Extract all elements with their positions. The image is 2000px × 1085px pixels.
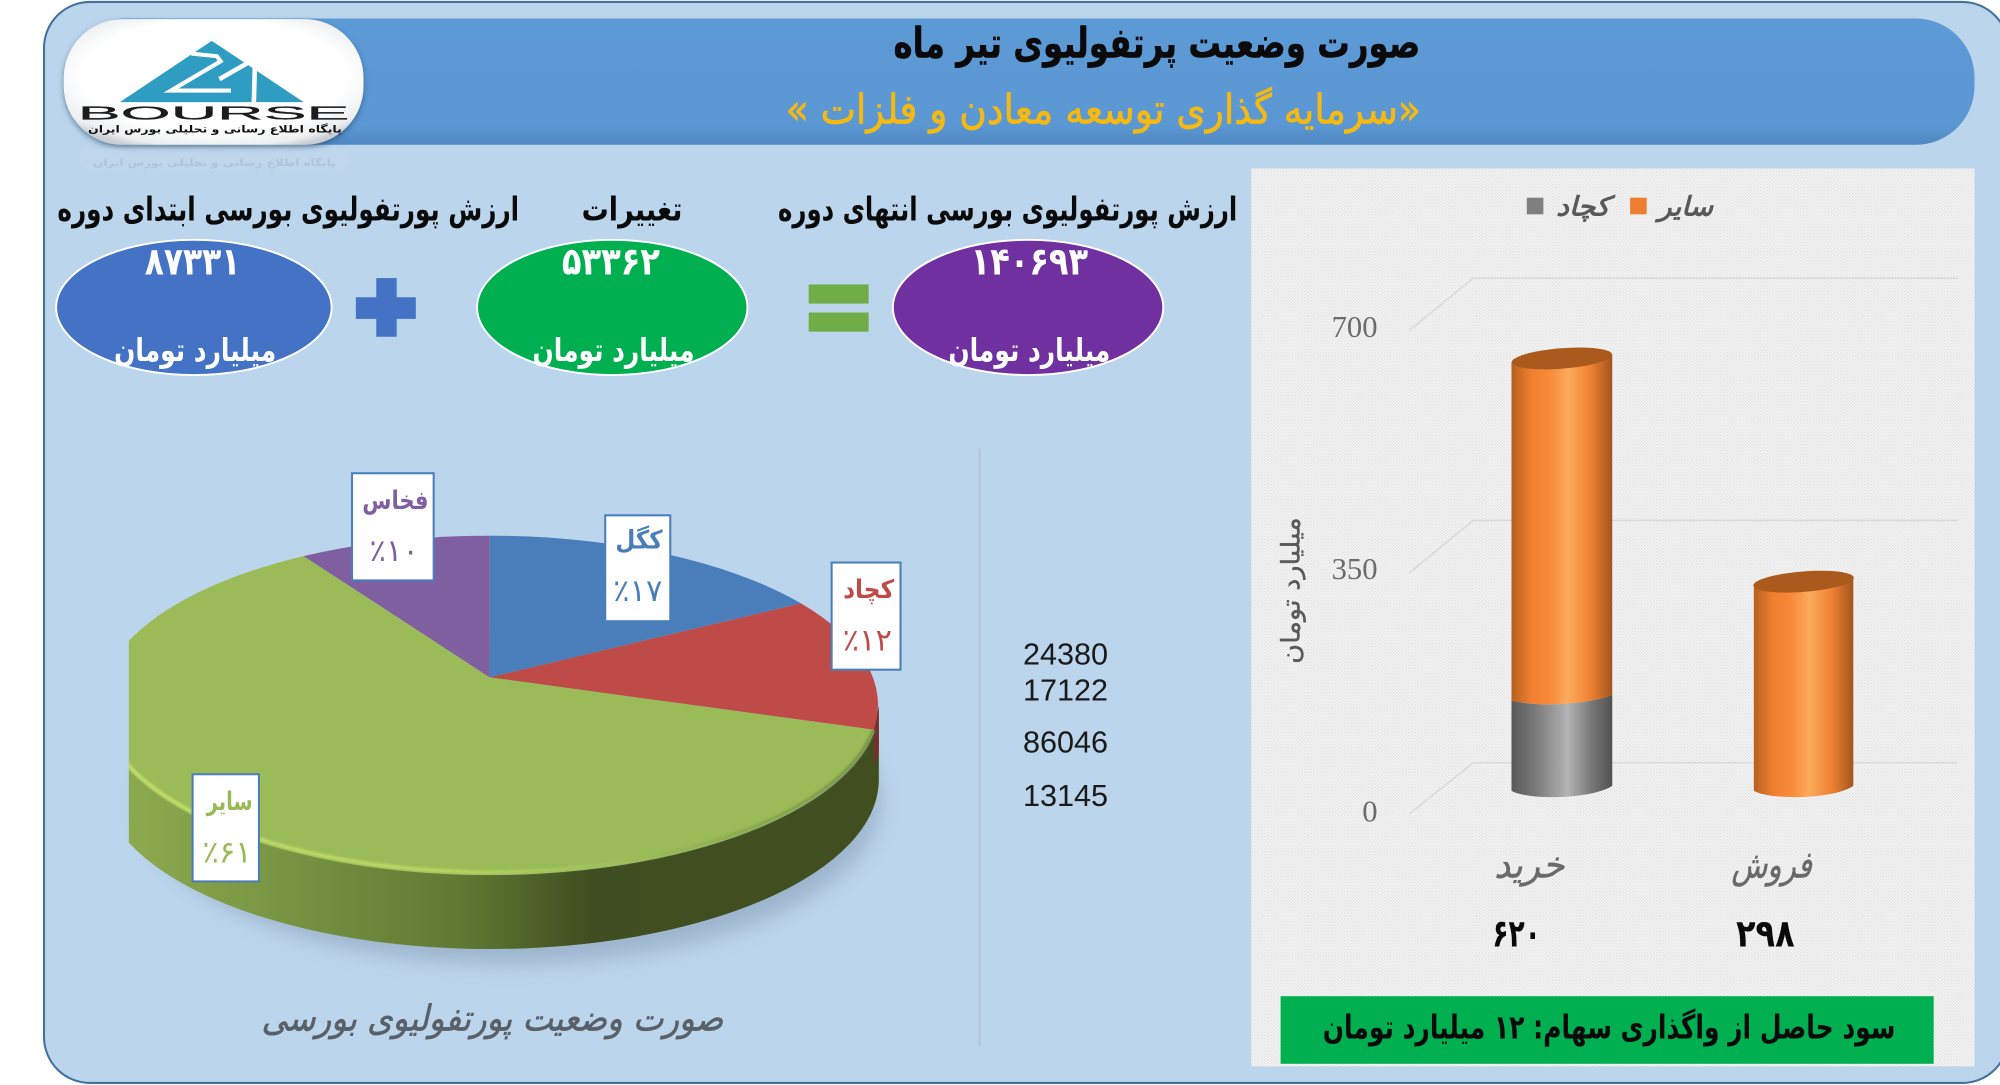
data label: کچاد: ٪۱۲ (843, 624, 892, 659)
ellipse: change value: میلیارد تومان (533, 331, 695, 369)
data label: کگل (605, 515, 670, 621)
data label: کچاد (832, 563, 901, 670)
header banner (66, 18, 1974, 145)
ellipse: end value: میلیارد تومان (948, 331, 1110, 369)
data label: کگل: ٪۱۷ (613, 574, 662, 609)
title: صورت وضعیت پرتفولیوی تیر ماه (893, 18, 1420, 68)
value: sell: ۲۹۸ (1736, 911, 1795, 956)
data label: کگل: کگل (615, 524, 663, 555)
ellipse: start value: میلیارد تومان (114, 331, 276, 369)
legend (1527, 192, 1715, 223)
y axis labels: 350 (1332, 552, 1378, 586)
subtitle: «سرمایه گذاری توسعه معادن و فلزات » (786, 86, 1421, 134)
value: buy: ۶۲۰ (1492, 911, 1541, 956)
label: changes: تغییرات (582, 190, 682, 230)
data label: فخاس: فخاس (362, 486, 429, 516)
category label: buy: خرید (1494, 844, 1565, 888)
logo reflection: پایگاه اطلاع رسانی و تحلیلی بورس ایران (93, 157, 335, 169)
cylinder: sell (1753, 568, 1855, 797)
values list: 86046 (1023, 726, 1108, 760)
data label: سایر (193, 774, 259, 881)
pie chart caption: صورت وضعیت پورتفولیوی بورسی (261, 999, 724, 1040)
label: start of period: ارزش پورتفولیوی بورسی ابتدای دوره (57, 190, 519, 230)
data label: فخاس (352, 473, 434, 580)
data label: فخاس: ٪۱۰ (369, 534, 419, 569)
category label: sell: فروش (1732, 844, 1813, 888)
ellipse: change value: ۵۳۳۶۲ (562, 239, 660, 284)
y axis labels: 700 (1332, 310, 1378, 344)
values list: 17122 (1023, 673, 1108, 707)
panel: purchases and sales chart (1251, 168, 1974, 1066)
logo reflection (79, 148, 349, 170)
data label: سایر: ٪۶۱ (202, 835, 252, 870)
values list: 13145 (1023, 779, 1108, 813)
ellipse: start value (56, 239, 332, 375)
ellipse: start value: ۸۷۳۳۱ (145, 239, 240, 284)
ellipse: change value (477, 239, 747, 375)
data label: سایر: سایر (205, 787, 253, 817)
pie chart (100, 473, 901, 964)
y axis labels (1332, 310, 1378, 828)
grid lines (1409, 278, 1958, 814)
ellipse: end value (893, 239, 1163, 375)
cylinder: buy (1511, 344, 1613, 797)
label: end of period: ارزش پورتفولیوی بورسی انتهای دوره (778, 190, 1237, 230)
ellipse: end value: ۱۴۰۶۹۳ (971, 239, 1088, 284)
legend: سایر (1654, 192, 1715, 223)
values list: 24380 (1023, 638, 1108, 672)
data label: کچاد: کچاد (843, 575, 894, 605)
legend: کچاد (1556, 192, 1616, 223)
logo mark triangle (120, 41, 304, 103)
y axis labels: 0 (1362, 794, 1378, 828)
profit banner (1281, 996, 1934, 1064)
vertical divider (979, 449, 981, 1046)
y axis title: میلیارد تومان (1277, 517, 1307, 664)
profit banner: سود حاصل از واگذاری سهام: ۱۲ میلیارد تومان (1323, 1007, 1895, 1047)
icon: plus (356, 278, 416, 337)
logo tagline: پایگاه اطلاع رسانی و تحلیلی بورس ایران (88, 123, 342, 136)
logo wordmark: BOURSE (78, 102, 349, 123)
values list (1023, 638, 1108, 813)
icon: equals (809, 284, 869, 332)
logo (64, 19, 364, 145)
